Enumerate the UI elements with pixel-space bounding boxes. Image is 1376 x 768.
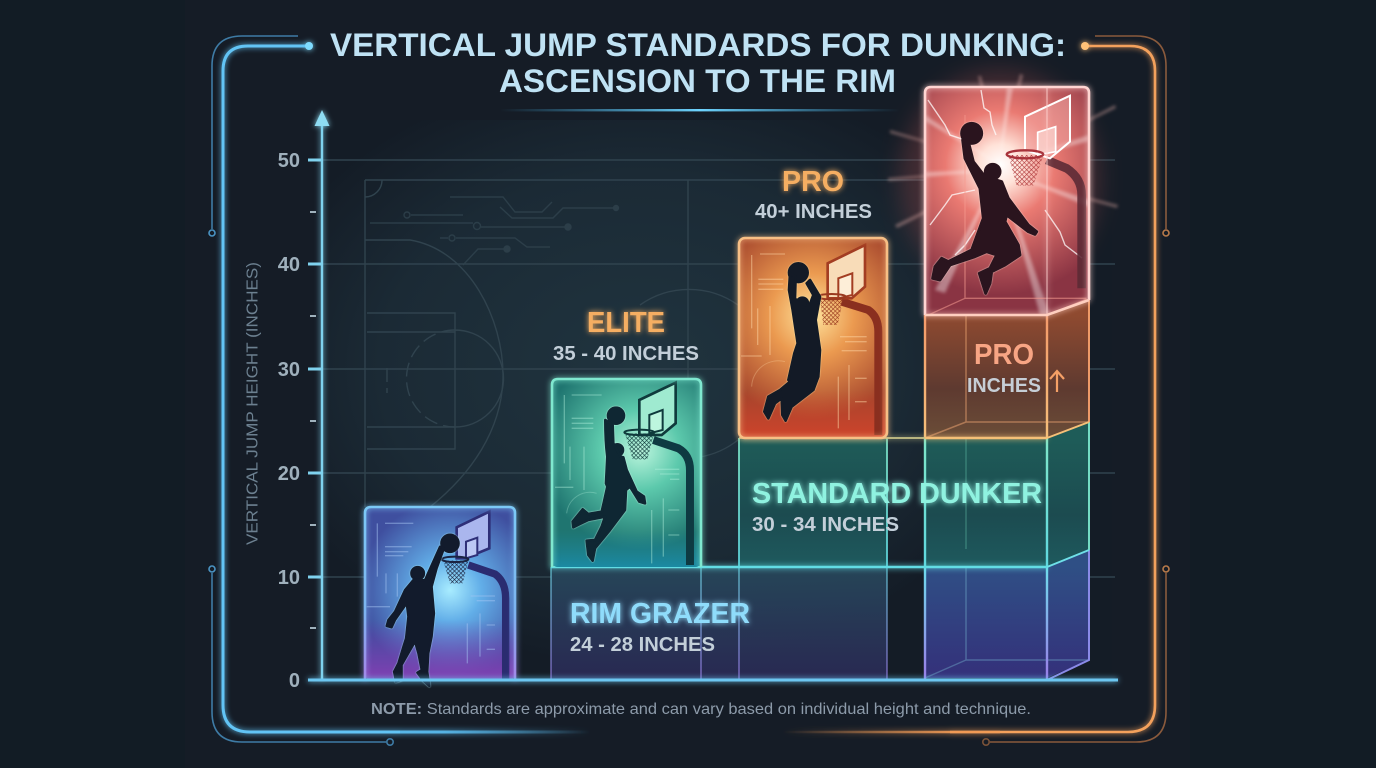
label: rim grazer: 24 - 28 INCHES [570, 633, 715, 656]
court and circuit backdrop [322, 160, 1115, 577]
title underline [500, 109, 900, 111]
label: standard dunker: STANDARD DUNKER [752, 478, 1042, 510]
net [443, 561, 468, 583]
icon: up arrow [1050, 371, 1064, 392]
chart axes with ticks [308, 110, 1118, 680]
title [330, 27, 1066, 99]
card frame [365, 507, 515, 680]
title: VERTICAL JUMP STANDARDS FOR DUNKING: [330, 27, 1066, 63]
label: pro: 40+ INCHES [755, 200, 872, 223]
label: standard dunker: 30 - 34 INCHES [752, 513, 899, 536]
net [1008, 155, 1043, 186]
pole [653, 440, 690, 565]
card frame [552, 379, 701, 567]
y axis tick labels [278, 150, 300, 692]
label: elite: 35 - 40 INCHES [553, 342, 699, 365]
label: standard dunker [752, 478, 1042, 536]
burst glow [900, 70, 1100, 290]
backboard [639, 383, 676, 435]
y axis tick labels: 40 [278, 254, 300, 276]
backboard [1025, 96, 1070, 158]
card frame [739, 238, 887, 438]
label: pro: PRO [782, 166, 844, 198]
label: elite: ELITE [587, 307, 665, 339]
pole [842, 302, 878, 435]
column block: orange upper [925, 300, 1089, 438]
net [820, 298, 843, 325]
label: pro in column [967, 339, 1064, 397]
pole [468, 565, 506, 680]
box floor [928, 115, 1087, 315]
label: pro [755, 166, 872, 223]
card details [741, 254, 867, 428]
y axis tick labels: 20 [278, 463, 300, 485]
card frame [925, 87, 1089, 315]
label: pro in column: INCHES [967, 374, 1041, 397]
y axis tick labels: 10 [278, 567, 300, 589]
outer rays [888, 74, 1118, 228]
label: pro in column: PRO [974, 339, 1034, 371]
y axis tick labels: 30 [278, 359, 300, 381]
card: elite player [552, 379, 701, 567]
y axis tick labels: 0 [289, 670, 300, 692]
column block: blue base [925, 549, 1089, 680]
pole [1047, 160, 1082, 288]
card: rim grazer player [365, 507, 515, 686]
player silhouette [573, 408, 645, 561]
card: top tier player with energy burst [888, 70, 1118, 315]
y axis tick labels: 50 [278, 150, 300, 172]
backboard [828, 245, 865, 298]
net [625, 433, 654, 459]
band: standard dunker [739, 438, 887, 567]
decorative frame: blue left bracket [209, 36, 590, 745]
decorative frame: orange right bracket [783, 36, 1169, 745]
card: pro player [739, 238, 887, 438]
horizontal glowing levels [551, 438, 1047, 567]
label: rim grazer: RIM GRAZER [570, 598, 750, 630]
label: rim grazer [570, 598, 750, 656]
card details [367, 523, 495, 663]
band: rim grazer [551, 567, 887, 680]
inner rays [925, 87, 1089, 315]
y axis label: VERTICAL JUMP HEIGHT (INCHES) [244, 262, 262, 545]
backboard [457, 512, 489, 558]
footnote: NOTE: Standards are approximate and can vary based on individual height and technique. [371, 701, 1031, 718]
3D stacked column [551, 300, 1089, 680]
lightning [928, 90, 1082, 258]
player silhouette [933, 123, 1037, 293]
player silhouette [387, 535, 459, 686]
title: ASCENSION TO THE RIM [499, 63, 896, 99]
label: elite [553, 307, 699, 365]
column block: teal middle [925, 422, 1089, 567]
card details [555, 395, 679, 563]
player silhouette [764, 263, 820, 421]
